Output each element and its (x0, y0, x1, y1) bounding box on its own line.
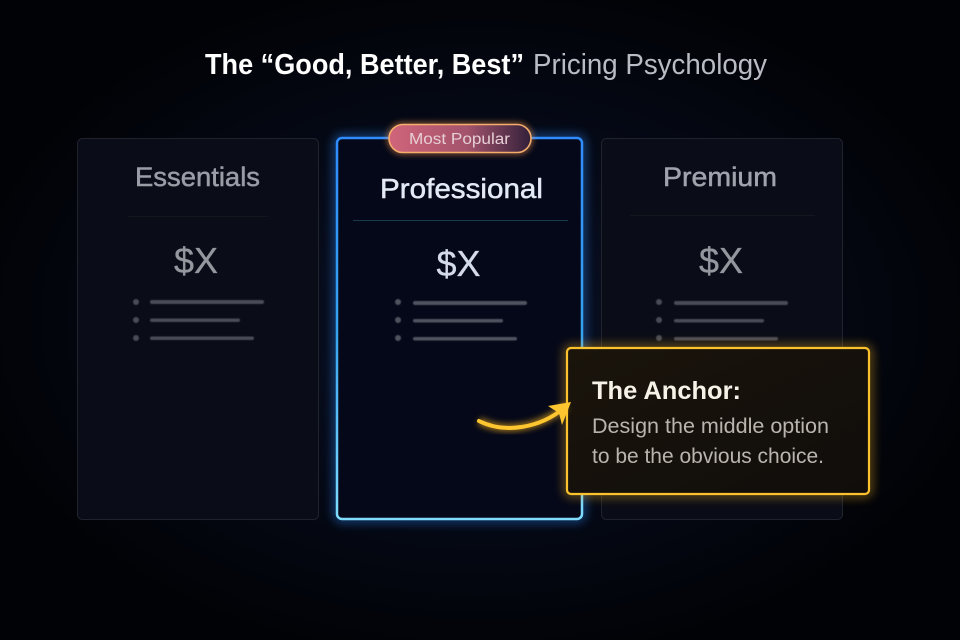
heading: Essentials: Essentials (135, 162, 260, 192)
title: Pricing Psychology (533, 49, 767, 81)
callout body: Design the middle option (592, 414, 829, 438)
heading: Premium: Premium (663, 162, 777, 192)
badge: Most Popular: Most Popular (409, 131, 510, 148)
heading: Professional: Professional (380, 173, 543, 204)
price: $X (174, 240, 218, 281)
panel: Essentials (78, 138, 318, 520)
feature list (656, 299, 788, 341)
feature list (395, 299, 527, 341)
panel: Premium (602, 138, 842, 520)
callout heading: The Anchor: (592, 377, 741, 405)
price: $X (436, 243, 480, 284)
title: The “Good, Better, Best” (205, 49, 524, 81)
arrow: to callout (479, 402, 571, 428)
title (205, 49, 767, 81)
price: $X (699, 240, 743, 281)
callout body: to be the obvious choice. (592, 444, 824, 468)
callout: The Anchor (567, 348, 869, 494)
panel: Professional (337, 138, 582, 519)
callout body (592, 414, 829, 468)
badge: Most Popular (389, 124, 531, 152)
feature list (133, 299, 264, 341)
